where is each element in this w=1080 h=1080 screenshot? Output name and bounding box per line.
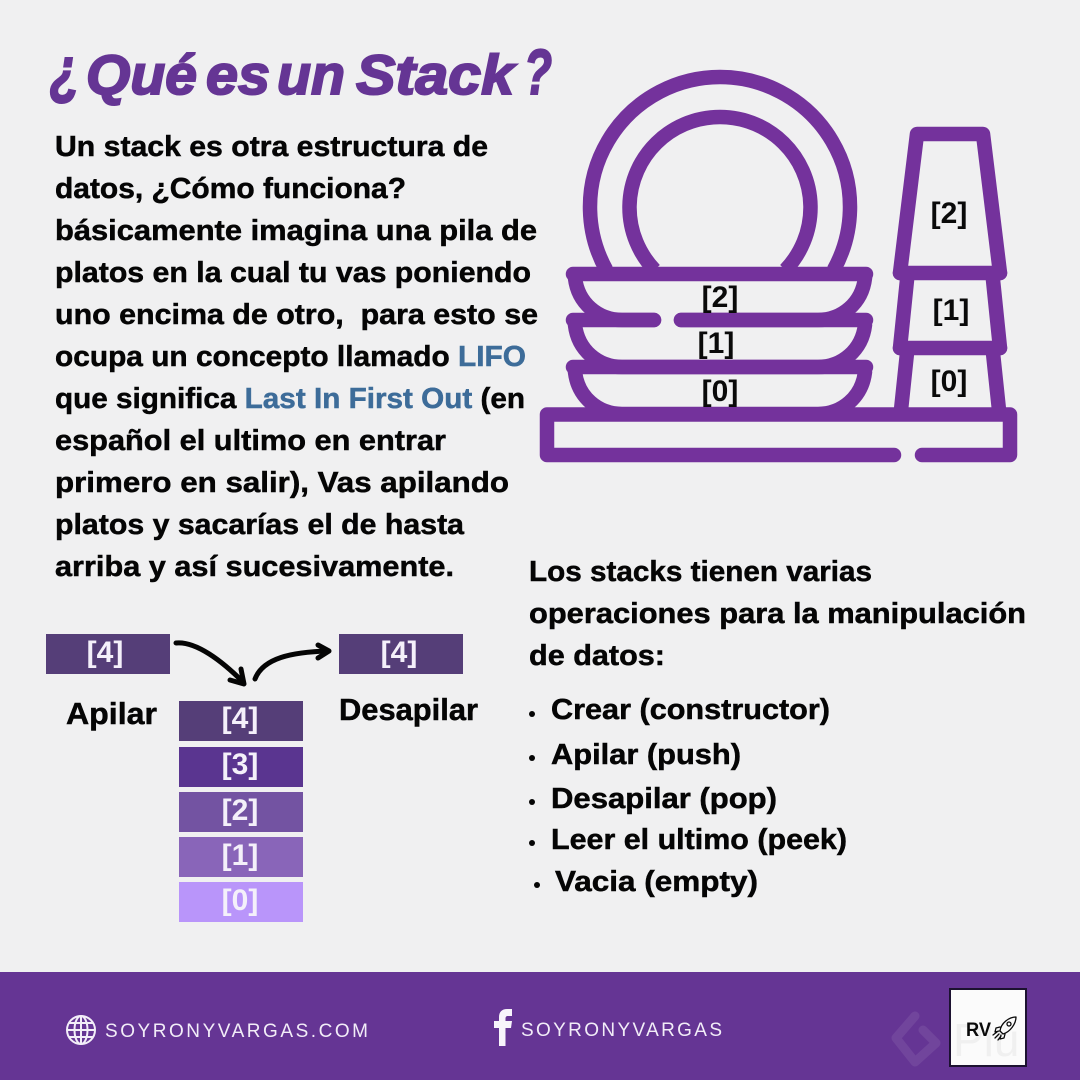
cup labels: [2] [931, 197, 967, 230]
text block: stack explanation: que significa Last In First Out (en [55, 383, 525, 415]
icon: plate stack [573, 274, 866, 414]
plate labels: [2] [702, 281, 738, 314]
text block: stack explanation: uno encima de otro, para esto se [55, 299, 538, 331]
arrow: push [176, 643, 244, 684]
stack of boxes: [4] [222, 702, 258, 735]
box: pushed item [46, 634, 170, 674]
stack of boxes: [0] [222, 884, 258, 917]
logo: RV rocket [950, 989, 1026, 1066]
title: Qué [86, 43, 197, 106]
text block: stack explanation: Un stack es otra estructura de [55, 131, 488, 163]
stack of boxes [179, 701, 303, 922]
label: Desapilar: Desapilar [339, 692, 478, 727]
icon: rocket [993, 1017, 1016, 1040]
icon: globe [67, 1016, 95, 1044]
list: operations: Desapilar (pop) [551, 783, 777, 815]
logo text: RV [966, 1020, 991, 1041]
text block: stack explanation: platos en la cual tu vas poniendo [55, 257, 531, 289]
icon: cup stack [900, 134, 1000, 410]
logo watermark: Plu [953, 1014, 1019, 1066]
text block: stack explanation: básicamente imagina una pila de [55, 215, 537, 247]
plate labels [698, 281, 738, 408]
website: SOYRONYVARGAS.COM [105, 1021, 368, 1042]
stack of boxes: [1] [222, 839, 258, 872]
title: Stack [356, 43, 517, 106]
diagram: push and pop [46, 634, 478, 922]
stack of boxes: [2] [222, 794, 258, 827]
title: es [206, 43, 270, 106]
text block: stack explanation: platos y sacarías el de hasta [55, 509, 465, 541]
box: pushed item: [4] [87, 636, 123, 669]
label: Apilar: Apilar [66, 696, 157, 731]
icon: shelf [547, 414, 1010, 455]
stack of boxes: [3] [222, 748, 258, 781]
facebook handle: SOYRONYVARGAS [521, 1020, 722, 1041]
text block: operations intro [529, 556, 1026, 672]
list: operations: Leer el ultimo (peek) [551, 824, 847, 856]
title: un [277, 43, 345, 106]
icon: stacked plates and cups [547, 77, 1010, 455]
list: operations [529, 694, 847, 898]
title: ? [524, 36, 552, 108]
title: ¿ [50, 34, 80, 106]
box: popped item: [4] [381, 636, 417, 669]
cup labels: [1] [933, 294, 969, 327]
list: operations: Crear (constructor) [551, 694, 830, 726]
text block: operations intro: Los stacks tienen varias [529, 556, 872, 588]
arrow: pop [255, 645, 329, 679]
box: popped item [339, 634, 463, 674]
text block: stack explanation: ocupa un concepto llamado LIFO [55, 341, 526, 373]
cup labels: [0] [931, 365, 967, 398]
text block: operations intro: de datos: [529, 640, 665, 672]
list: operations: Vacia (empty) [555, 866, 758, 898]
footer [0, 972, 1080, 1080]
text block: stack explanation: español el ultimo en entrar [55, 425, 446, 457]
text block: stack explanation: primero en salir), Vas apilando [55, 467, 509, 499]
cup labels [931, 197, 969, 398]
title [50, 34, 552, 108]
plate labels: [0] [702, 375, 738, 408]
watermark: Platzi [896, 1016, 936, 1062]
icon: facebook [494, 1009, 512, 1046]
text block: stack explanation [55, 131, 538, 583]
plate labels: [1] [698, 327, 734, 360]
text block: stack explanation: datos, ¿Cómo funciona? [55, 173, 406, 205]
list: operations: Apilar (push) [551, 739, 741, 771]
text block: stack explanation: arriba y así sucesivamente. [55, 551, 454, 583]
icon: plate standing behind the stack [590, 77, 850, 270]
text block: operations intro: operaciones para la manipulación [529, 598, 1026, 630]
